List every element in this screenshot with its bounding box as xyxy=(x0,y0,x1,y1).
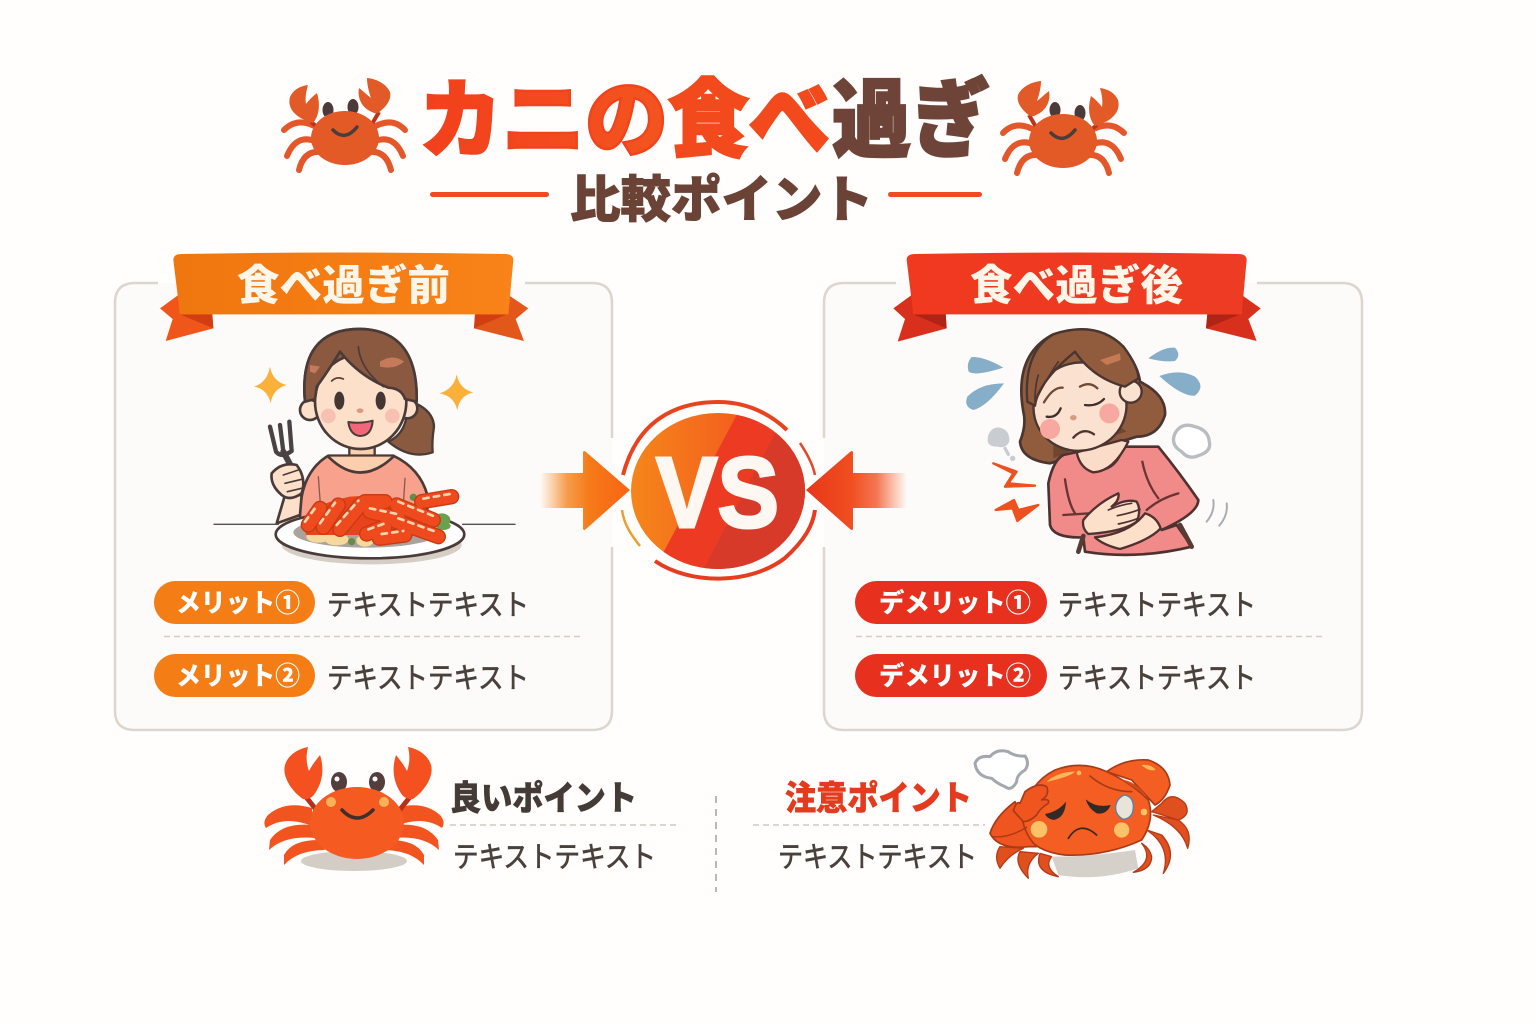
banner: before xyxy=(160,252,528,341)
VS badge: VS xyxy=(656,437,779,549)
merit row 1: メリット① xyxy=(176,583,300,620)
merit row 2: メリット② xyxy=(176,656,300,693)
banner text: after: 食べ過ぎ後 xyxy=(970,252,1183,313)
heading: main title: 食べ xyxy=(668,74,830,169)
plate xyxy=(282,526,462,564)
hair xyxy=(1020,329,1165,463)
pain bolts xyxy=(993,463,1035,487)
face details xyxy=(334,392,344,410)
smoke puffs xyxy=(988,428,1009,447)
heading: good point: 良いポイント xyxy=(450,771,637,820)
fringe xyxy=(1027,329,1138,406)
icon: crab left of title xyxy=(284,78,405,170)
sparkles xyxy=(254,367,473,410)
panel: before overeating xyxy=(115,252,612,730)
banner: after xyxy=(893,252,1261,342)
face xyxy=(1045,802,1066,820)
heading: main title: カニの xyxy=(419,74,668,169)
demerit row 2 xyxy=(855,654,1256,697)
body xyxy=(300,456,427,525)
good point section xyxy=(264,747,678,876)
sweater body and hands xyxy=(1048,447,1198,555)
demerit row 1: デメリット① xyxy=(879,583,1031,620)
panel frame left xyxy=(115,283,612,730)
illustration: woman with stomach ache xyxy=(966,329,1227,555)
banner text: before: 食べ過ぎ前 xyxy=(237,252,450,313)
legs xyxy=(997,797,1189,878)
title block xyxy=(284,74,1124,232)
crab legs on plate xyxy=(301,494,452,547)
demerit row 1 xyxy=(855,581,1256,624)
face xyxy=(1024,352,1136,461)
arrow: right pointing to VS xyxy=(806,451,907,530)
body xyxy=(1022,765,1151,855)
ear xyxy=(1120,381,1142,403)
demerit row 1: テキストテキスト xyxy=(1058,582,1256,624)
raised claw xyxy=(1107,760,1170,805)
fringe xyxy=(304,329,417,402)
merit row 2 xyxy=(154,654,529,697)
text: caution point: テキストテキスト xyxy=(778,834,977,876)
thought cloud xyxy=(975,751,1027,788)
heading: caution point: 注意ポイント xyxy=(785,771,972,820)
caution point section xyxy=(753,751,1189,878)
merit row 2: テキストテキスト xyxy=(327,655,529,697)
demerit row 2: デメリット② xyxy=(879,656,1031,693)
shadow belly xyxy=(1052,850,1138,877)
illustration: happy woman eating crab xyxy=(214,329,515,564)
table line xyxy=(214,522,515,526)
merit row 1: テキストテキスト xyxy=(327,582,529,624)
neck xyxy=(349,445,375,460)
arm on forehead xyxy=(990,802,1037,847)
panel: after overeating xyxy=(824,252,1362,730)
heading: subtitle with side rules xyxy=(430,160,982,232)
ponytail xyxy=(388,400,434,455)
hair back xyxy=(304,329,417,402)
neck xyxy=(1077,440,1128,472)
icon: crab right of title xyxy=(1003,81,1124,173)
merit row 1 xyxy=(154,581,529,624)
text: good point: テキストテキスト xyxy=(453,834,656,876)
heading: subtitle with side rules: 比較ポイント xyxy=(570,160,873,232)
arm and hand with fork xyxy=(277,495,302,523)
ears xyxy=(300,400,320,420)
arrow: left pointing to VS xyxy=(540,451,630,530)
icon: sad crab xyxy=(975,751,1189,878)
panel frame right xyxy=(824,283,1362,730)
sweat drops xyxy=(966,348,1200,410)
motion lines xyxy=(1207,500,1227,526)
icon: happy crab xyxy=(264,747,444,871)
heading: main title xyxy=(419,74,990,169)
face xyxy=(315,354,406,449)
sad face details xyxy=(1047,399,1104,417)
heading: main title: 過ぎ xyxy=(832,74,990,169)
demerit row 2: テキストテキスト xyxy=(1058,655,1256,697)
VS badge xyxy=(622,402,820,580)
